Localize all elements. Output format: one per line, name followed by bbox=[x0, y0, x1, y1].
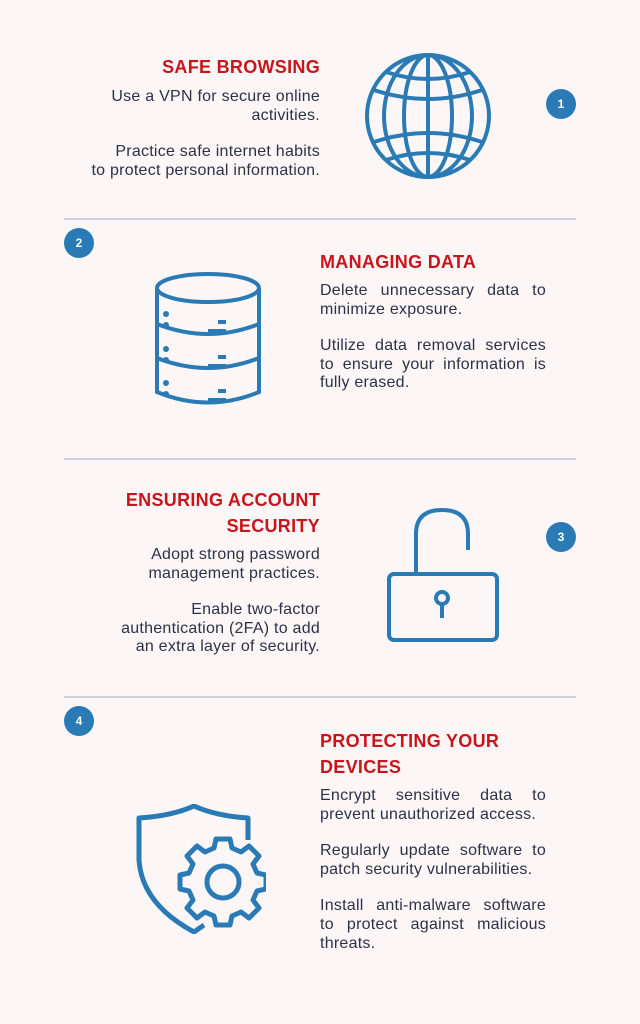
text: managing data: Delete unnecessary data to bbox=[320, 282, 546, 299]
text: account security: an extra layer of security. bbox=[136, 638, 320, 655]
text: protecting devices: Regularly update software to bbox=[320, 842, 546, 859]
icon: shield gear bbox=[136, 804, 266, 934]
text: managing data bbox=[320, 282, 546, 391]
text: protecting devices: Encrypt sensitive data to bbox=[320, 787, 546, 804]
badge 1 bbox=[546, 89, 576, 119]
title: protecting devices bbox=[320, 731, 499, 777]
text: safe browsing: to protect personal information. bbox=[91, 162, 320, 179]
text: protecting devices: to protect against malicious bbox=[320, 916, 546, 933]
badge 1: 1 bbox=[558, 97, 564, 111]
text: safe browsing bbox=[91, 88, 320, 179]
text: protecting devices bbox=[320, 787, 546, 952]
badge 2: 2 bbox=[76, 236, 82, 250]
text: account security: management practices. bbox=[148, 565, 320, 582]
title: account security: SECURITY bbox=[227, 516, 320, 536]
text: protecting devices: patch security vulnerabilities. bbox=[320, 861, 532, 878]
title: account security bbox=[126, 490, 320, 536]
text: account security: authentication (2FA) to add bbox=[121, 620, 320, 637]
text: account security: Enable two-factor bbox=[191, 601, 320, 618]
badge 3: 3 bbox=[558, 530, 564, 544]
title: account security: ENSURING ACCOUNT bbox=[126, 490, 320, 510]
title: protecting devices: DEVICES bbox=[320, 757, 401, 777]
text: account security bbox=[121, 546, 320, 655]
text: managing data: fully erased. bbox=[320, 374, 410, 391]
title: managing data: MANAGING DATA bbox=[320, 252, 476, 272]
text: managing data: Utilize data removal services bbox=[320, 337, 546, 354]
text: managing data: minimize exposure. bbox=[320, 301, 462, 318]
text: safe browsing: Practice safe internet habits bbox=[115, 143, 320, 160]
text: managing data: to ensure your information is bbox=[320, 356, 546, 373]
icon: lock bbox=[387, 508, 499, 642]
text: account security: Adopt strong password bbox=[151, 546, 320, 563]
badge 2 bbox=[64, 228, 94, 258]
icon: globe bbox=[365, 53, 491, 179]
badge 4 bbox=[64, 706, 94, 736]
title: protecting devices: PROTECTING YOUR bbox=[320, 731, 499, 751]
text: safe browsing: Use a VPN for secure online bbox=[111, 88, 320, 105]
title: safe browsing: SAFE BROWSING bbox=[162, 57, 320, 77]
text: protecting devices: Install anti-malware software bbox=[320, 897, 546, 914]
badge 4: 4 bbox=[76, 714, 82, 728]
text: protecting devices: threats. bbox=[320, 935, 375, 952]
icon: database bbox=[155, 272, 261, 404]
text: safe browsing: activities. bbox=[251, 107, 320, 124]
text: protecting devices: prevent unauthorized access. bbox=[320, 806, 536, 823]
badge 3 bbox=[546, 522, 576, 552]
